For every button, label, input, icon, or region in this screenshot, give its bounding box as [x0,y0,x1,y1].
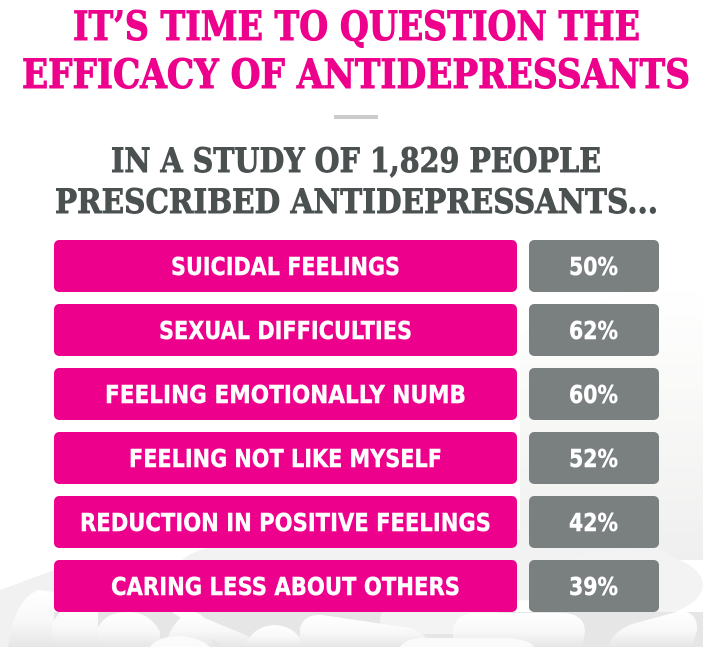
row: caring less about others: 39% [569,572,618,601]
row: feeling not like myself [54,432,659,484]
row: sexual difficulties: 62% [569,316,618,345]
row: feeling emotionally numb [54,368,659,420]
row: caring less about others [54,560,659,612]
row: feeling emotionally numb: FEELING EMOTIONALLY NUMB [105,380,466,409]
row: feeling not like myself: 52% [569,444,618,473]
row: reduction in positive feelings [54,496,659,548]
row: reduction in positive feelings: REDUCTION IN POSITIVE FEELINGS [80,508,491,537]
row: feeling emotionally numb: 60% [569,380,618,409]
row: caring less about others: CARING LESS ABOUT OTHERS [111,572,460,601]
subtitle [55,141,658,222]
row: suicidal feelings: 50% [569,252,618,281]
row: suicidal feelings: SUICIDAL FEELINGS [171,252,400,281]
row: suicidal feelings [54,240,659,292]
row: feeling not like myself: FEELING NOT LIKE MYSELF [129,444,442,473]
subtitle: IN A STUDY OF 1,829 PEOPLE [111,141,601,181]
row: sexual difficulties: SEXUAL DIFFICULTIES [159,316,412,345]
row: sexual difficulties [54,304,659,356]
divider [334,115,378,119]
title [22,3,690,98]
row: reduction in positive feelings: 42% [569,508,618,537]
